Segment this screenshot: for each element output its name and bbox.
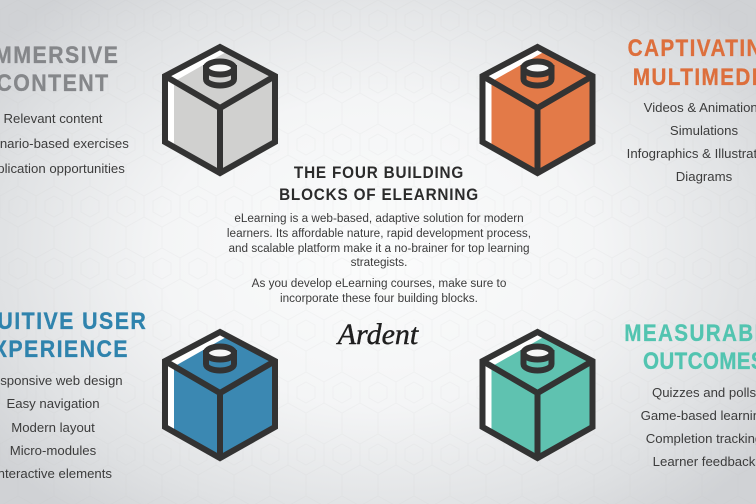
intro text: learners. Its affordable nature, rapid development process, [227,227,531,240]
instruction text: incorporate these four building blocks. [280,292,478,305]
title: BLOCKS OF ELEARNING [279,185,479,204]
heading: immersive content [0,42,119,97]
title [279,163,479,204]
intro text: strategists. [351,256,407,269]
instruction text: As you develop eLearning courses, make sure to [252,277,506,290]
heading: measurable outcomes [624,320,756,375]
heading: captivating multimedia [628,35,756,91]
logo: Ardent: Ardent [338,318,418,351]
intro text: eLearning is a web-based, adaptive solution for modern [234,212,524,225]
title: THE FOUR BUILDING [294,163,464,182]
instruction text [252,277,506,305]
heading: intuitive user experience [0,308,147,363]
intro text: and scalable platform make it a no-brainer for top learning [228,242,530,255]
intro text [227,212,531,269]
